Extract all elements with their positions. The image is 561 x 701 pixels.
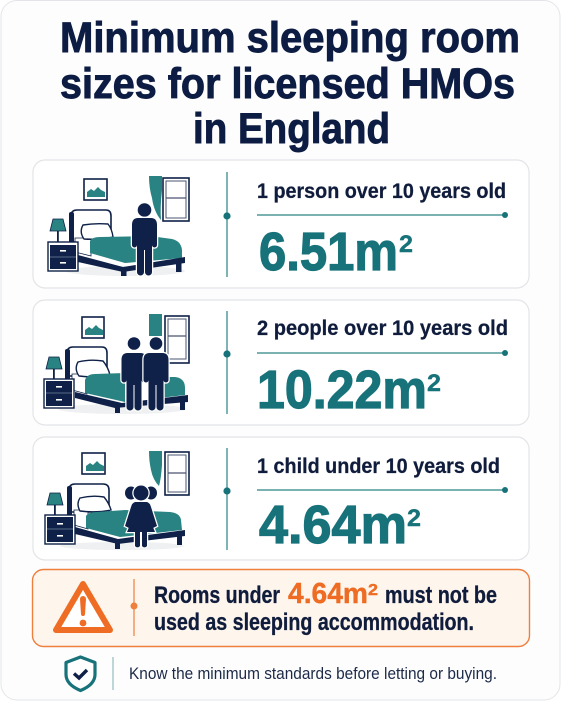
divider with dot bbox=[223, 172, 231, 277]
title bbox=[60, 14, 520, 153]
icon: bedroom with one adult bbox=[48, 176, 189, 276]
panel: 2 people over 10 years old bbox=[33, 300, 529, 425]
warning text: Rooms under bbox=[154, 582, 280, 609]
title: sizes for licensed HMOs bbox=[60, 60, 515, 108]
title: Minimum sleeping room bbox=[60, 14, 520, 62]
label: 1 person over 10 years old bbox=[257, 180, 506, 203]
warning text: used as sleeping accommodation. bbox=[154, 609, 474, 636]
warning text bbox=[154, 578, 497, 636]
footer text: Know the minimum standards before letting or buying. bbox=[129, 665, 497, 683]
value: 10.22 m2: 10.22m bbox=[257, 360, 427, 420]
label: 2 people over 10 years old bbox=[257, 317, 508, 340]
icon: warning triangle bbox=[56, 584, 110, 630]
icon: bedroom with one child bbox=[45, 451, 189, 550]
label: 1 child under 10 years old bbox=[257, 455, 500, 478]
warning text: 4.64m bbox=[288, 578, 368, 610]
rule with dot bbox=[257, 212, 508, 218]
panel: 1 person over 10 years old bbox=[33, 160, 529, 288]
divider with dot bbox=[223, 311, 231, 414]
divider with dot bbox=[130, 579, 138, 636]
callout: warning bbox=[32, 570, 530, 646]
value: 4.64 m2: 4.64m bbox=[259, 495, 407, 555]
value: 6.51 m2: 6.51m bbox=[259, 222, 398, 282]
warning text: must not be bbox=[385, 582, 497, 609]
title: in England bbox=[193, 105, 390, 153]
value: 4.64 m2: 2 bbox=[407, 505, 421, 532]
panel: 1 child under 10 years old bbox=[33, 437, 529, 560]
rule with dot bbox=[257, 487, 508, 493]
warning text: 2 bbox=[368, 582, 378, 599]
value: 10.22 m2: 2 bbox=[427, 370, 441, 397]
icon: bedroom with two adults bbox=[44, 314, 189, 414]
divider with dot bbox=[223, 448, 231, 550]
footer note bbox=[66, 657, 497, 690]
value: 6.51 m2: 2 bbox=[399, 231, 413, 258]
icon: shield with check bbox=[66, 657, 95, 690]
rule with dot bbox=[257, 350, 508, 356]
